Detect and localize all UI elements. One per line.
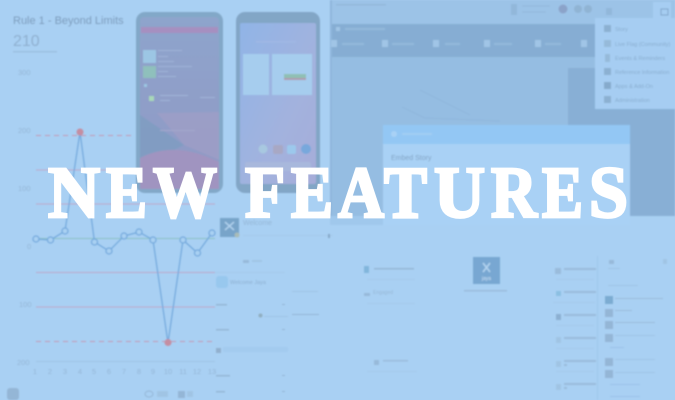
lower app screenshot panel: Welcome	[243, 220, 272, 227]
embed story dialog: Embed Story	[391, 155, 432, 162]
title: N	[48, 152, 100, 233]
y axis labels: 0	[27, 242, 31, 251]
y axis labels: 100	[18, 184, 31, 193]
title: E	[291, 152, 333, 233]
title: W	[153, 152, 217, 233]
dropdown menu: Administration	[615, 98, 650, 104]
toolbar items	[331, 27, 587, 47]
y axis labels	[17, 68, 32, 367]
x axis labels: 8	[137, 367, 141, 376]
right feed list	[553, 268, 596, 390]
phone: left	[136, 12, 223, 193]
y axis labels: 300	[18, 68, 31, 77]
right screenshot	[330, 0, 675, 225]
lower app screenshot panel	[215, 218, 667, 400]
top bar details	[336, 4, 612, 15]
dropdown menu: Story	[615, 27, 628, 33]
title: S	[589, 152, 628, 233]
dropdown menu: Events & Reminders	[615, 56, 665, 62]
faint sketch	[402, 90, 500, 121]
x axis labels	[33, 367, 216, 376]
phone: right	[236, 12, 320, 193]
embed story dialog	[383, 125, 630, 225]
chart title: Rule 1 - Beyond Limits	[13, 15, 124, 27]
phone screen wallpaper	[157, 112, 219, 160]
title: A	[338, 152, 384, 233]
x axis labels: 3	[63, 367, 67, 376]
x axis labels: 10	[164, 367, 172, 376]
x axis labels: 9	[151, 367, 155, 376]
x axis labels: 5	[92, 367, 96, 376]
chart panel: Rule 1 Beyond Limits	[7, 15, 216, 400]
title: E	[106, 152, 147, 233]
activity sidebar	[605, 259, 667, 397]
title	[48, 152, 628, 233]
control limit lines	[36, 136, 215, 362]
search bar	[245, 162, 311, 171]
title: U	[434, 152, 485, 233]
title: F	[245, 152, 285, 233]
x axis labels: 12	[193, 367, 201, 376]
app icons	[258, 144, 311, 154]
data points	[33, 228, 215, 256]
x axis labels: 4	[78, 367, 82, 376]
outlier points	[76, 128, 172, 346]
title: R	[491, 152, 538, 233]
y axis labels: 200	[18, 126, 31, 135]
panel heading: Welcome Jaya	[230, 280, 267, 286]
y axis labels: 200	[17, 358, 30, 367]
x axis labels: 6	[107, 367, 111, 376]
footer icons	[7, 388, 193, 400]
dropdown menu: Live Flag (Community)	[615, 42, 670, 48]
dropdown menu	[595, 2, 675, 109]
chart value: 210	[13, 33, 40, 50]
dropdown menu: Reference Information	[615, 70, 669, 76]
center app tile	[473, 257, 500, 284]
phone list items	[143, 50, 156, 63]
x axis labels: 13	[208, 367, 216, 376]
data line	[36, 132, 212, 343]
widget cards	[243, 54, 269, 95]
y axis labels: 100	[19, 300, 32, 309]
lower app screenshot panel: jaya	[481, 276, 491, 282]
x axis labels: 11	[179, 367, 187, 376]
x axis labels: 1	[33, 367, 37, 376]
lower app screenshot panel: Engaged	[373, 290, 393, 296]
dropdown menu: Apps & Add-On	[615, 84, 653, 90]
title: E	[542, 152, 583, 233]
left feed items	[364, 266, 369, 273]
x axis labels: 7	[122, 367, 126, 376]
x axis labels: 2	[48, 367, 52, 376]
title: T	[384, 152, 427, 233]
